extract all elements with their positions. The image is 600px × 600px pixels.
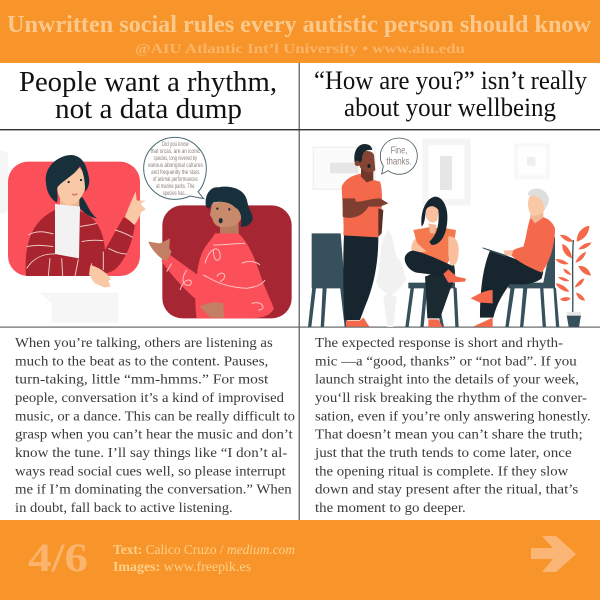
body text: right column: mic —a “good, thanks” or “not bad”. If you	[315, 354, 577, 369]
body text: right column: sation, even if you’re only answering honestly.	[315, 409, 591, 424]
body text: left column: me if I’m dominating the conversation.” When	[15, 483, 292, 498]
standing man	[342, 144, 388, 327]
body text: left column: turn-taking, little “mm-hmms.” For most	[15, 373, 268, 388]
speech bubble: Fine, thanks: thanks.	[386, 157, 412, 168]
body text: right column: launch straight into the details of your week,	[315, 373, 579, 388]
body text: right column: down and stay present after the ritual, that’s	[315, 483, 578, 498]
body text: left column: music, or a dance. This can be really difficult to	[15, 409, 295, 424]
middle chair	[405, 283, 459, 327]
speech bubble: orca fact: species, long revered by	[154, 155, 198, 162]
body text: right column: you‘ll risk breaking the rhythm of the conver-	[315, 391, 587, 406]
subtitle: @AIU Atlantic Int’l University • www.aiu.edu	[135, 42, 465, 57]
body text: left column: much to the beat as to the content. Pauses,	[15, 354, 268, 369]
speech bubble: orca fact: of animal performances	[153, 176, 198, 183]
credits	[113, 542, 295, 574]
body text: left column: know the tune. I’ll say things like “I don’t al-	[15, 446, 288, 461]
speech bubble: orca fact: at marine parks. The	[156, 183, 195, 190]
heading: right column: “How are you?” isn’t really	[314, 65, 588, 95]
illustration: people seated in a group	[308, 138, 592, 327]
seated woman	[405, 197, 466, 327]
illustration: two people talking	[0, 136, 292, 322]
body text: right column: That doesn’t mean you can’t share the truth;	[315, 428, 583, 443]
credits: Text: Calico Cruzo / medium.com	[113, 542, 295, 557]
man	[148, 187, 274, 318]
potted plant	[555, 226, 592, 327]
heading: left column: not a data dump	[55, 93, 242, 125]
body text: right column: the opening ritual is complete. If they slow	[315, 464, 569, 479]
heading: right column: about your wellbeing	[344, 92, 556, 122]
woman	[26, 155, 146, 287]
body text: left column: in doubt, fall back to active listening.	[15, 501, 233, 516]
speech bubble: orca fact: species has...	[163, 190, 188, 197]
body text: right column	[314, 336, 591, 516]
speech bubble: orca fact	[144, 137, 206, 199]
body text: left column: people, conversation it’s a kind of improvised	[15, 391, 284, 406]
dark red panel behind man	[162, 205, 292, 318]
body text: right column: just that the truth tends to come later, once	[314, 446, 572, 461]
credits: Images: www.freepik.es	[113, 559, 251, 574]
body text: left column: ways read social cues well, so please interrupt	[15, 464, 286, 479]
red panel behind woman	[8, 162, 140, 276]
body text: right column: the moment to go deeper.	[315, 501, 466, 516]
faint wall frames and plant	[313, 138, 550, 327]
speech bubble: orca fact: Did you know	[162, 141, 189, 148]
heading: left column: People want a rhythm,	[19, 66, 277, 98]
heading: left column	[19, 66, 277, 125]
faint background shapes	[0, 151, 118, 323]
speech bubble: Fine, thanks	[380, 138, 417, 174]
left chair	[308, 233, 348, 327]
footer band	[0, 520, 600, 600]
header band	[0, 0, 600, 63]
heading: right column	[314, 65, 588, 122]
speech bubble: orca fact: and frequently the stars	[151, 169, 199, 176]
speech bubble: orca fact: that orcas, are an iconic	[151, 148, 200, 155]
icon: next arrow	[531, 536, 576, 572]
right chair	[505, 237, 559, 327]
body text: left column	[15, 336, 295, 516]
speech bubble: Fine, thanks: Fine,	[391, 145, 407, 156]
body text: left column: grasp when you can’t hear the music and don’t	[15, 428, 293, 443]
page number: 4/6	[28, 535, 88, 580]
body text: right column: The expected response is short and rhyth-	[315, 336, 563, 351]
seated man with tablet	[471, 189, 555, 327]
title: Unwritten social rules every autistic person should know	[7, 12, 592, 38]
speech bubble: orca fact: various aboriginal cultures	[148, 162, 203, 169]
body text: left column: When you’re talking, others are listening as	[15, 336, 273, 351]
